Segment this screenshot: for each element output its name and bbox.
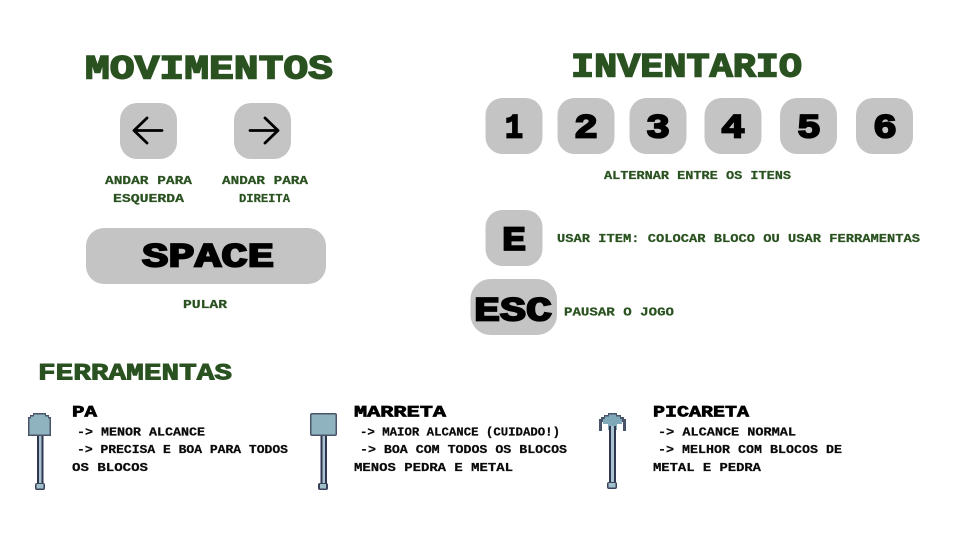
key: left arrow	[120, 103, 177, 159]
label: pular: PULAR	[183, 298, 228, 312]
label: pausar o jogo: PAUSAR O JOGO	[564, 306, 674, 320]
tool: marreta: -> BOA COM TODOS OS BLOCOS	[360, 443, 567, 457]
label: alternar entre os itens: ALTERNAR ENTRE OS ITENS	[604, 169, 791, 183]
panel: ferramentas	[28, 360, 842, 490]
key: 4	[704, 98, 762, 154]
heading: movimentos: MOVIMENTOS	[85, 52, 333, 90]
key: space: SPACE	[142, 240, 274, 278]
tool: pa: -> MENOR ALCANCE	[77, 426, 205, 440]
tool: picareta: PICARETA	[653, 404, 749, 422]
tool: picareta: METAL E PEDRA	[653, 461, 762, 475]
key: 2	[558, 98, 614, 154]
tool: pa	[72, 404, 288, 475]
icon: pickaxe	[599, 413, 626, 489]
label: andar para direita	[222, 174, 309, 206]
key: 1	[486, 98, 542, 154]
key: 1: 1	[505, 110, 523, 148]
key: 4: 4	[721, 110, 745, 148]
label: andar para esquerda	[105, 174, 193, 206]
label: andar para direita: DIREITA	[239, 192, 291, 206]
key: E: E	[502, 223, 526, 261]
key: 3	[630, 98, 686, 154]
key: 5: 5	[797, 110, 821, 148]
tool: marreta	[354, 404, 567, 475]
panel: inventario	[470, 50, 920, 335]
key: 2: 2	[574, 110, 598, 148]
icon: shovel	[28, 413, 51, 490]
tool: pa: PA	[72, 404, 98, 422]
heading: ferramentas: FERRAMENTAS	[38, 360, 232, 386]
key: 6: 6	[873, 110, 897, 148]
label: usar item: USAR ITEM: COLOCAR BLOCO OU USAR FERRAMENTAS	[557, 232, 920, 246]
tool: marreta: MARRETA	[354, 404, 447, 422]
tool: pa: -> PRECISA E BOA PARA TODOS	[77, 443, 288, 457]
tool: picareta: -> ALCANCE NORMAL	[658, 426, 796, 440]
key: ESC	[470, 279, 557, 335]
tool: picareta	[653, 404, 842, 475]
label: andar para esquerda: ESQUERDA	[113, 192, 185, 206]
key: 6	[856, 98, 913, 154]
icon: sledgehammer	[310, 413, 337, 490]
key: right arrow	[234, 103, 291, 159]
tool: marreta: -> MAIOR ALCANCE (CUIDADO!)	[360, 426, 560, 440]
label: andar para direita: ANDAR PARA	[222, 174, 309, 188]
tool: marreta: MENOS PEDRA E METAL	[354, 461, 513, 475]
key: E	[486, 210, 542, 266]
key: ESC: ESC	[474, 294, 552, 332]
label: andar para esquerda: ANDAR PARA	[105, 174, 193, 188]
tool: pa: OS BLOCOS	[72, 461, 148, 475]
tool: picareta: -> MELHOR COM BLOCOS DE	[658, 443, 842, 457]
key: space	[86, 228, 326, 284]
panel: movimentos	[85, 52, 333, 312]
heading: inventario: INVENTARIO	[571, 50, 802, 88]
key: 3: 3	[646, 110, 670, 148]
key: 5	[780, 98, 837, 154]
